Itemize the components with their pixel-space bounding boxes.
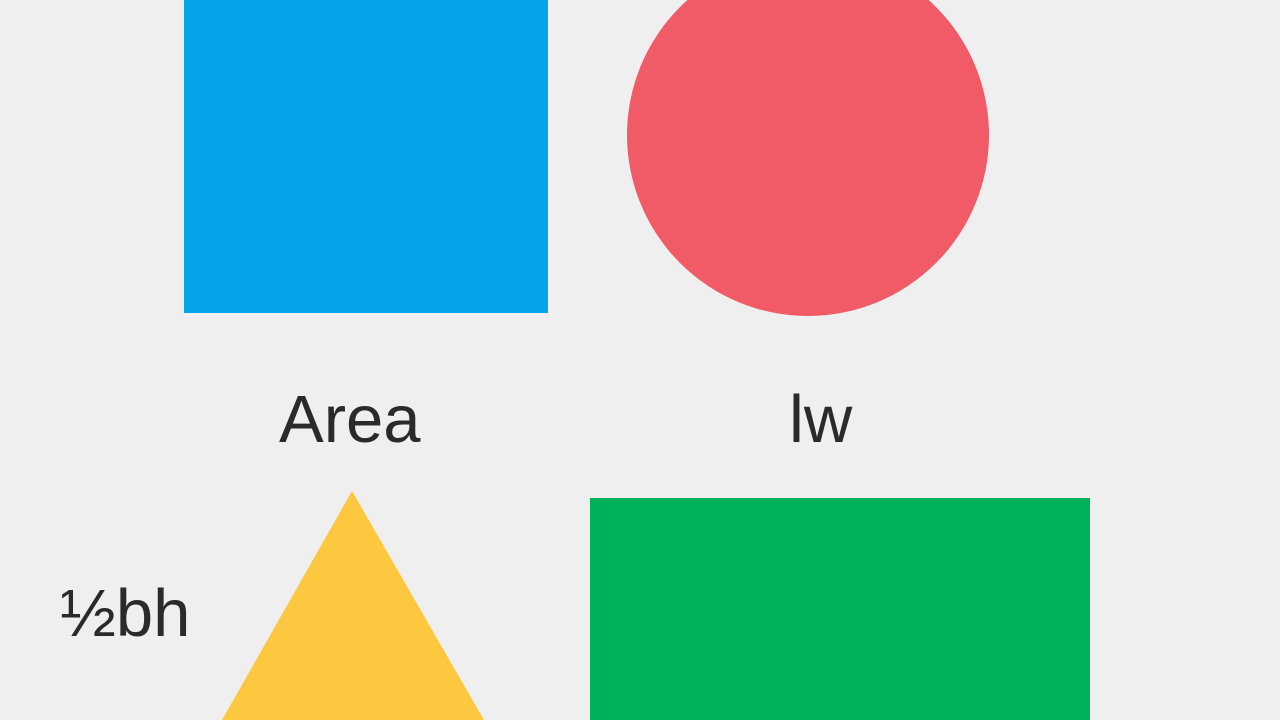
label: Area: Area [279,382,421,457]
label: half base times height: ½bh [60,576,190,651]
shape: green rectangle [590,498,1090,720]
shape: red circle [627,0,989,316]
shape: blue square [184,0,548,313]
label: lw: lw [789,382,852,457]
